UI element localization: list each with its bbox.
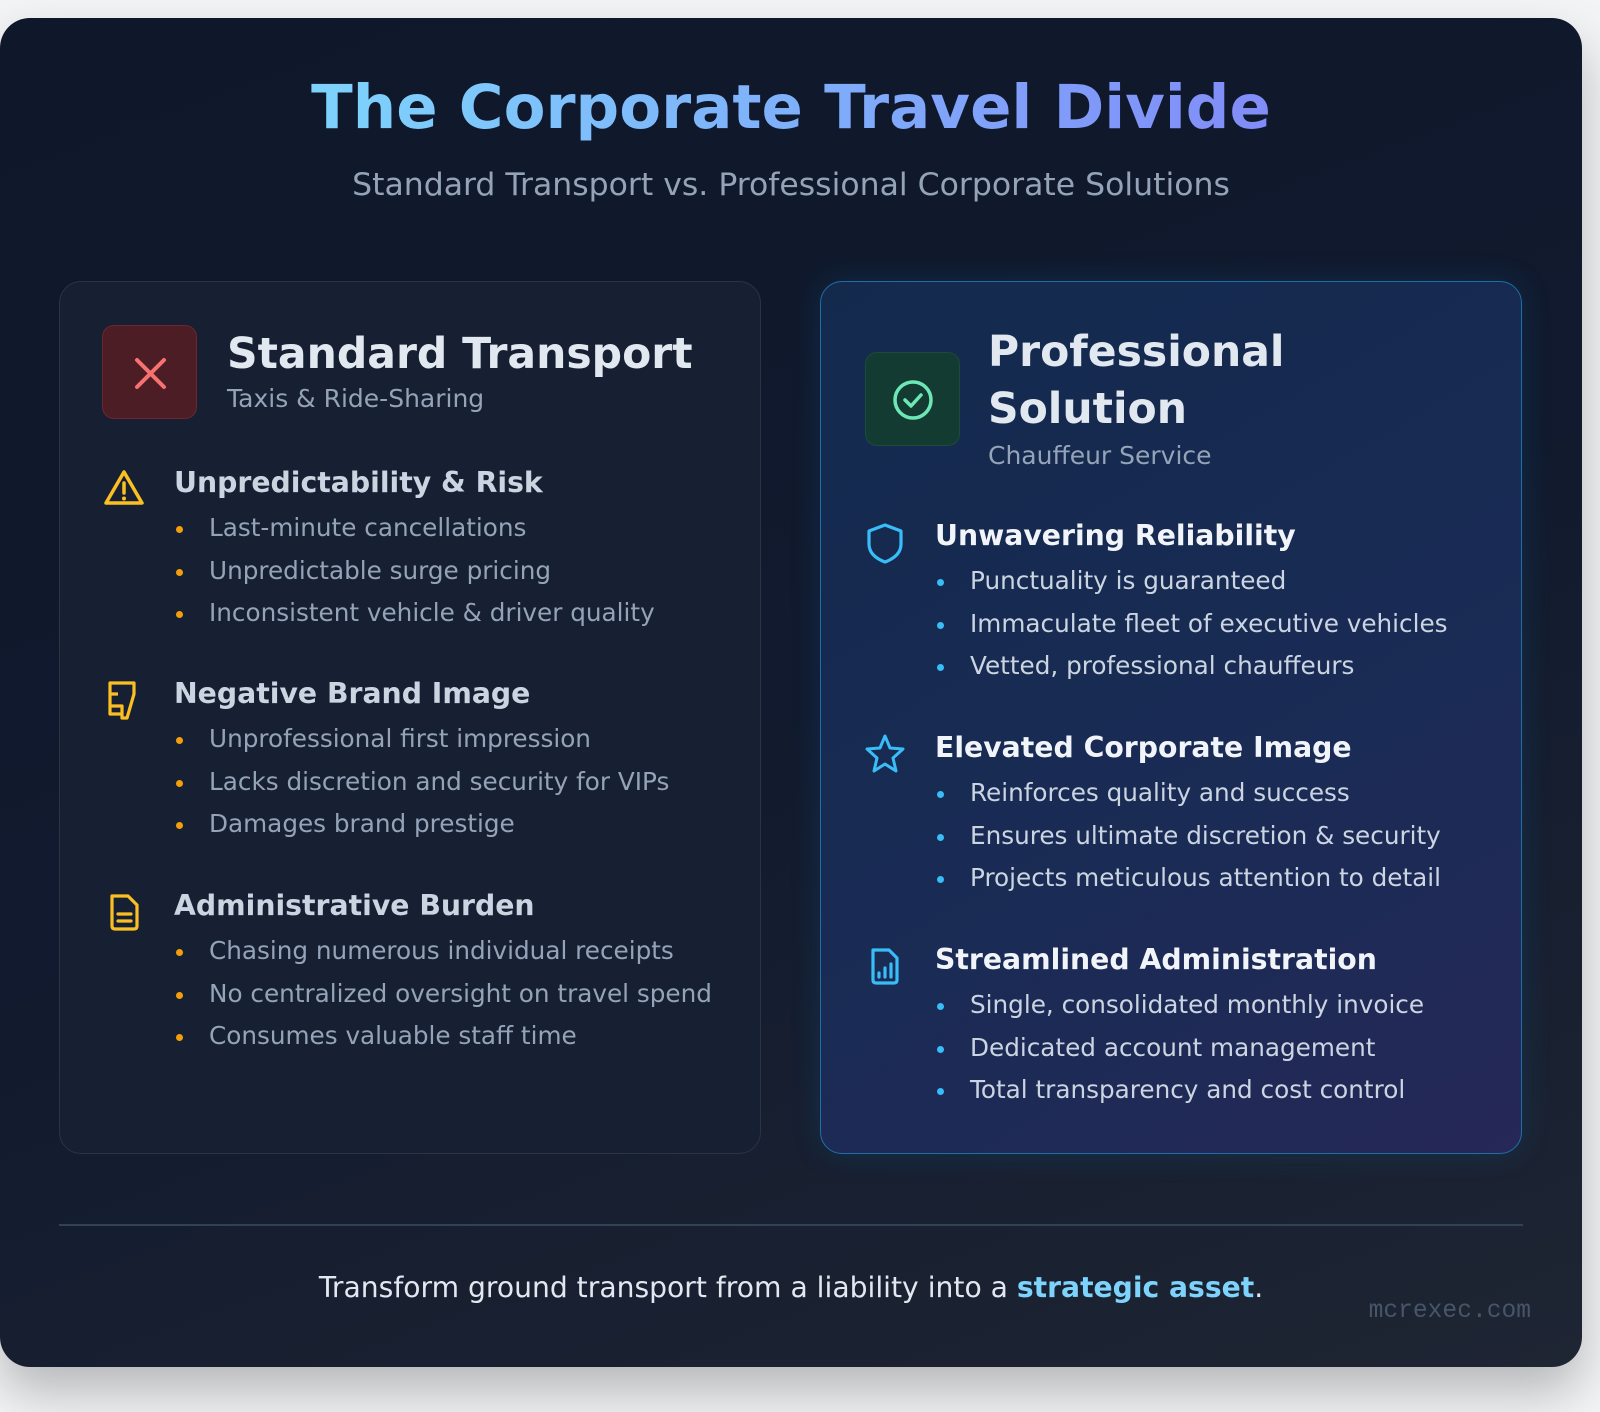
section: negative brand image: Negative Brand Image: [174, 677, 530, 710]
section: unpredictability: [104, 466, 655, 627]
heading: standard transport: Standard Transport: [227, 330, 693, 379]
section: streamlined administration: [871, 943, 1424, 1104]
section: administrative burden: No centralized oversight on travel spend: [209, 979, 712, 1008]
icon: thumbs down: [108, 681, 136, 720]
icon: green check box: [865, 352, 960, 446]
icon: star: [865, 734, 904, 773]
heading: professional solution: Professional: [988, 328, 1284, 377]
section: corporate image: [865, 731, 1441, 892]
section: administrative burden: Chasing numerous individual receipts: [209, 936, 674, 965]
icon: warning: [104, 470, 144, 505]
title: The Corporate Travel Divide: [311, 72, 1271, 143]
section: unpredictability: Unpredictable surge pricing: [209, 556, 551, 585]
heading: standard transport: [226, 330, 693, 413]
heading: professional solution: Solution: [988, 385, 1187, 434]
section: reliability: [867, 519, 1448, 680]
section: streamlined administration: Single, consolidated monthly invoice: [970, 990, 1424, 1019]
section: negative brand image: [108, 677, 669, 838]
heading: standard transport: Taxis & Ride-Sharing: [227, 384, 484, 413]
section: negative brand image: Unprofessional first impression: [209, 724, 591, 753]
section: reliability: Unwavering Reliability: [935, 519, 1296, 552]
section: reliability: Punctuality is guaranteed: [970, 566, 1286, 595]
panel: professional solution: [820, 281, 1522, 1154]
section: administrative burden: Administrative Burden: [174, 889, 535, 922]
section: corporate image: Ensures ultimate discretion & security: [970, 821, 1441, 850]
icon: document: [110, 894, 139, 931]
heading: professional solution: [988, 328, 1284, 470]
section: corporate image: Elevated Corporate Image: [935, 731, 1352, 764]
section: negative brand image: Lacks discretion and security for VIPs: [209, 767, 669, 796]
section: streamlined administration: Streamlined Administration: [935, 943, 1377, 976]
section: administrative burden: [110, 889, 712, 1050]
heading: professional solution: Chauffeur Service: [988, 441, 1212, 470]
icon: red x box: [102, 325, 197, 419]
section: streamlined administration: Total transparency and cost control: [970, 1075, 1405, 1104]
icon: shield: [867, 523, 903, 564]
section: reliability: Vetted, professional chauffeurs: [970, 651, 1354, 680]
section: unpredictability: Inconsistent vehicle & driver quality: [209, 598, 655, 627]
section: negative brand image: Damages brand prestige: [209, 809, 515, 838]
section: streamlined administration: Dedicated account management: [970, 1033, 1375, 1062]
section: unpredictability: Last-minute cancellations: [209, 513, 526, 542]
subtitle: Standard Transport vs. Professional Corporate Solutions: [352, 167, 1230, 203]
section: corporate image: Reinforces quality and success: [970, 778, 1350, 807]
watermark: mcrexec.com: [1369, 1298, 1531, 1325]
footer tagline: Transform ground transport from a liability into a strategic asset.: [319, 1271, 1263, 1304]
section: administrative burden: Consumes valuable staff time: [209, 1021, 577, 1050]
panel: standard transport: [59, 281, 761, 1154]
section: reliability: Immaculate fleet of executive vehicles: [970, 609, 1448, 638]
icon: report: [871, 948, 899, 985]
section: corporate image: Projects meticulous attention to detail: [970, 863, 1441, 892]
section: unpredictability: Unpredictability & Risk: [174, 466, 543, 499]
